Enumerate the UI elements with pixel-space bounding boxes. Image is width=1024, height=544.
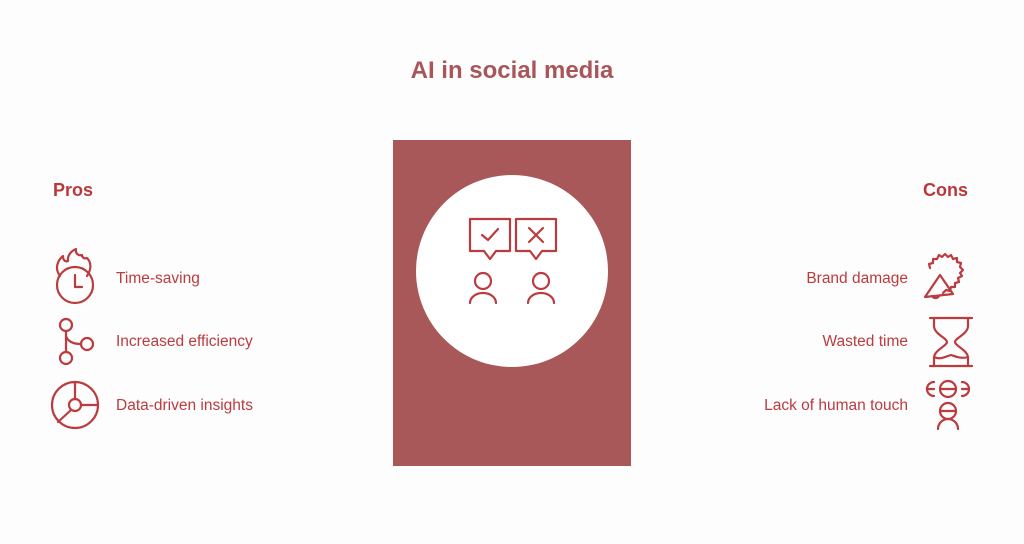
- cons text: Lack of human touch: Lack of human touch: [764, 397, 908, 414]
- center panel: [393, 140, 631, 466]
- title: AI in social media: [411, 57, 613, 84]
- heading: Pros: Pros: [53, 180, 93, 200]
- icon: megaphone burst: [925, 254, 963, 298]
- icon: pie chart: [52, 382, 98, 428]
- pros text: Data-driven insights: Data-driven insights: [116, 397, 253, 414]
- pros text: Increased efficiency: Increased efficiency: [116, 333, 253, 350]
- cons text: Brand damage: Brand damage: [806, 270, 908, 287]
- icon: reject bubble: [516, 219, 556, 259]
- icon: branch: [60, 319, 93, 364]
- icon: approve bubble: [470, 219, 510, 259]
- circle with icons: [416, 175, 608, 367]
- icon: people faces: [927, 381, 969, 429]
- cons text: Wasted time: Wasted time: [822, 333, 908, 350]
- icon: person right: [528, 273, 554, 303]
- pros text: Time-saving: Time-saving: [116, 270, 200, 287]
- icon: clock with flame: [57, 249, 93, 303]
- heading: Cons: Cons: [923, 180, 968, 200]
- icon: hourglass: [930, 318, 972, 366]
- icon: person left: [470, 273, 496, 303]
